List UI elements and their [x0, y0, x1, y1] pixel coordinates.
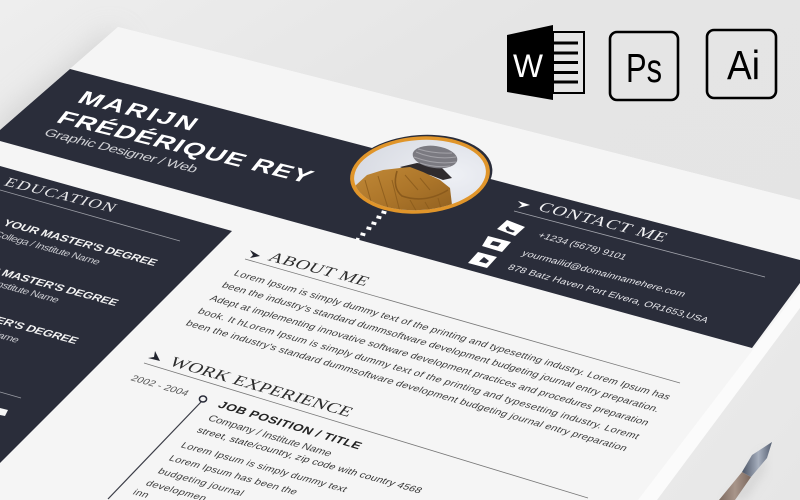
icon: illustrator [707, 30, 776, 98]
phone number: +1234 (5678) 9101 [535, 231, 629, 262]
job address: street, state/country, zip code with country 4568 [194, 426, 424, 496]
about paragraph: been the industry's standard dummsoftware development budgeting journal entry preparation. [219, 281, 662, 414]
about paragraph: been the industry's standard dummsoftware development budgeting journal entry preparation [183, 319, 629, 453]
work experience section [108, 351, 588, 500]
profile photo [350, 134, 492, 214]
skills rule [0, 392, 21, 398]
icon: phone [497, 220, 525, 236]
photo outer ring [347, 130, 495, 218]
last name: FRÉDÉRIQUE REY [52, 107, 318, 187]
first name: MARIJN [73, 88, 203, 135]
header band [0, 69, 800, 348]
job description: inn [130, 488, 152, 500]
photo backdrop [354, 140, 486, 210]
work rule [144, 363, 588, 498]
contact heading: CONTACT ME [535, 199, 671, 245]
postal address: 878 Batz Haven Port Elvera, OR1653,USA [505, 263, 711, 325]
email address: yourmailid@domainnamehere.com [519, 249, 688, 299]
icon: word [507, 25, 584, 100]
about rule [245, 259, 680, 383]
degree 1: YOUR MASTER'S DEGREE [0, 218, 160, 268]
pen nib [742, 442, 772, 477]
icon: photoshop [610, 32, 678, 100]
job description: Lorem Ipsum has been the [166, 454, 300, 497]
contact arrow [518, 201, 530, 208]
company: Company / Institute Name [205, 413, 335, 459]
hat [412, 146, 458, 168]
about me section [183, 249, 680, 453]
panel: education [0, 166, 232, 463]
icon: mail [482, 236, 511, 252]
pen body [719, 472, 751, 500]
timeline [108, 396, 207, 499]
skills icon [0, 408, 8, 416]
icon: word: W [513, 48, 544, 84]
job title: JOB POSITION / TITLE [215, 399, 365, 452]
work arrow [148, 351, 160, 361]
contact rule [514, 211, 765, 277]
contact section [468, 199, 765, 325]
about paragraph [183, 269, 673, 453]
about arrow [250, 250, 260, 258]
candidate name [52, 88, 318, 187]
paper shadow [0, 30, 130, 160]
about paragraph: book. It hLorem Ipsum is simply dummy text of the printing and typesetting industry. Loremt [195, 307, 642, 442]
work dates: 2002 - 2004 [128, 374, 191, 398]
photo orange ring [347, 132, 493, 218]
job description: budgeting journal [155, 467, 246, 498]
about paragraph: Lorem Ipsum is simply dummy text of the printing and typesetting industry. Lorem Ipsum has [231, 269, 673, 402]
icon: illustrator: Ai [727, 42, 760, 88]
about paragraph: Adept at implementing innovative software development practices and procedures preparation [207, 294, 651, 428]
pen [719, 442, 772, 500]
about heading: ABOUT ME [265, 249, 373, 289]
icon: home [468, 252, 497, 268]
coat [356, 167, 452, 210]
education rule [0, 190, 180, 241]
education heading: EDUCATION [1, 176, 120, 215]
job title: Graphic Designer / Web [41, 126, 202, 175]
icon: photoshop: Ps [626, 45, 662, 91]
scarf [400, 163, 452, 180]
pen shadow [725, 450, 765, 500]
dotted connector [356, 210, 387, 240]
work heading: WORK EXPERIENCE [166, 354, 357, 420]
job description: Lorem Ipsum is simply dummy text [178, 441, 349, 494]
